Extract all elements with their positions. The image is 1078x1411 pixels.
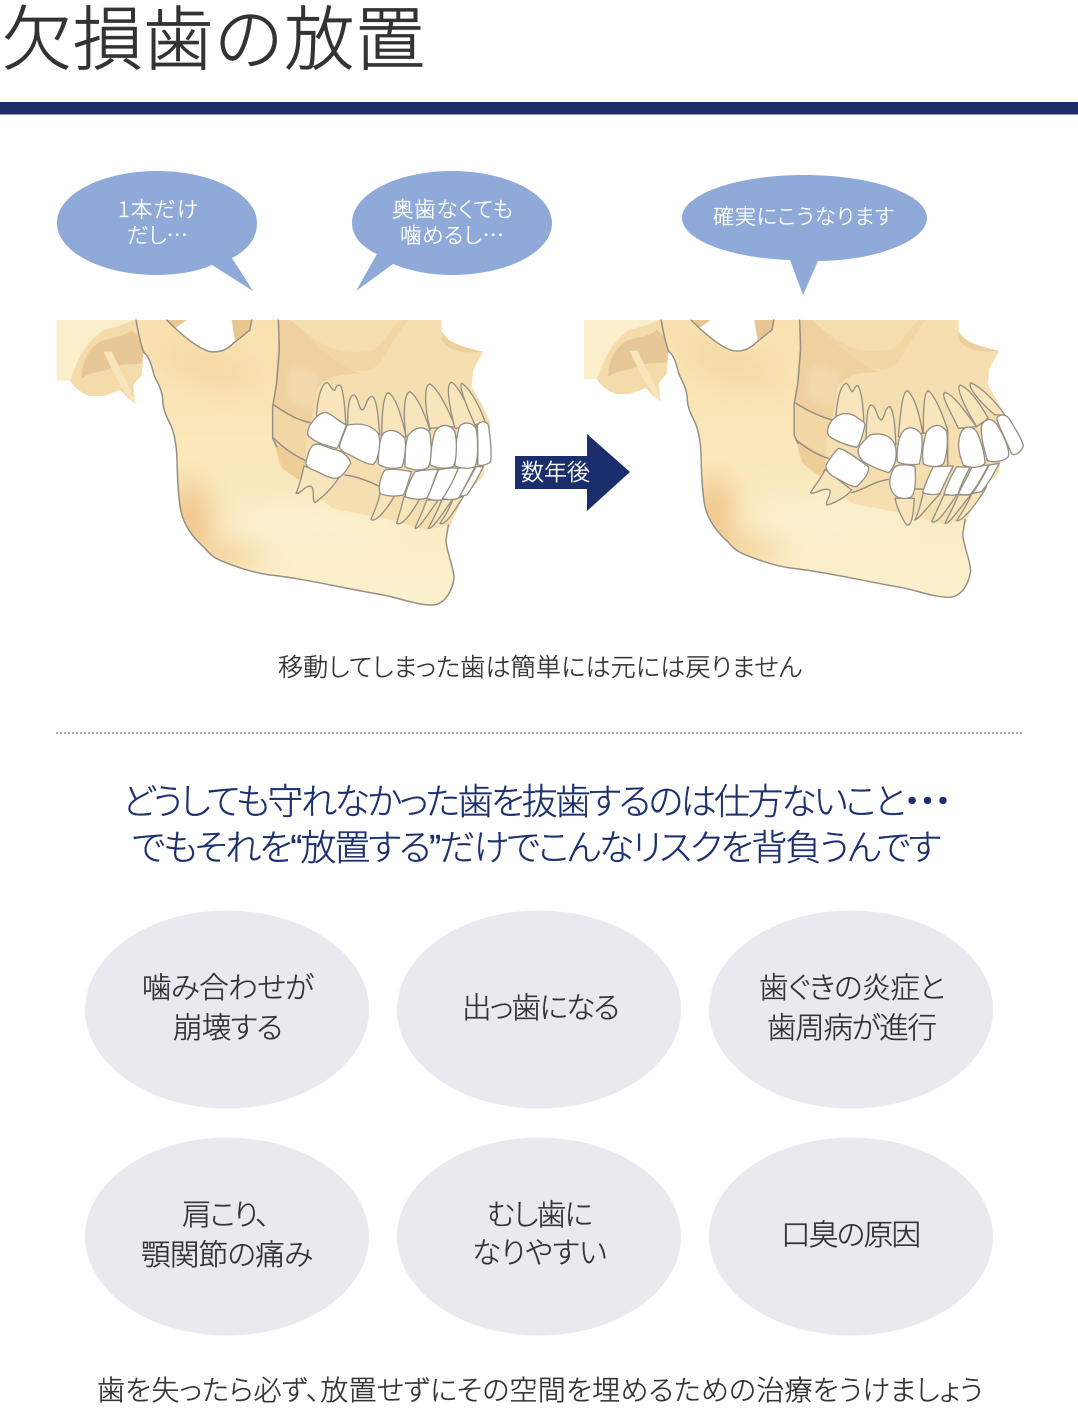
lower tooth roots	[296, 466, 463, 528]
arrow: 数年後: 数年後	[521, 453, 590, 487]
risk: むし歯になりやすい	[397, 1138, 681, 1336]
arrow: 数年後	[515, 434, 630, 511]
speech bubble: 奥歯なくても	[352, 171, 552, 291]
closing message: 歯を失ったら必ず、放置せずにその空間を埋めるための治療をうけましょう	[97, 1369, 983, 1409]
risk: 噛み合わせが崩壊する: 噛み合わせが	[142, 965, 314, 1007]
lower tooth roots	[811, 469, 987, 525]
lower crowns	[306, 444, 483, 500]
gum lines	[796, 403, 948, 493]
upper crowns	[828, 414, 1023, 473]
risk: むし歯になりやすい: なりやすい	[472, 1230, 607, 1272]
speech bubble: 1本だけだし	[57, 171, 257, 291]
risk: 口臭の原因: 口臭の原因	[781, 1212, 921, 1254]
risk: 歯ぐきの炎症と歯周病が進行: 歯周病が進行	[767, 1005, 937, 1047]
risk: 歯ぐきの炎症と歯周病が進行	[709, 910, 993, 1108]
title bar	[0, 102, 1078, 114]
lead text: でもそれを“放置する”だけでこんなリスクを背負うんです	[132, 827, 941, 868]
risk: 出っ歯になる: 出っ歯になる	[462, 985, 620, 1027]
jaw illustration: after	[584, 320, 1023, 597]
speech bubble: 1本だけだし: 1本だけ	[118, 193, 198, 224]
speech bubble: 確実にこうなります: 確実にこうなります	[713, 201, 894, 231]
risk: 肩こり、顎関節の痛み: 顎関節の痛み	[141, 1232, 313, 1274]
risk: 肩こり、顎関節の痛み	[85, 1138, 369, 1336]
risk: 口臭の原因	[709, 1138, 993, 1336]
lower crowns	[826, 448, 999, 498]
risk: 歯ぐきの炎症と歯周病が進行: 歯ぐきの炎症と	[759, 965, 945, 1007]
jaw illustration: before	[57, 320, 491, 605]
risk: 噛み合わせが崩壊する	[85, 910, 369, 1108]
upper crowns	[308, 413, 491, 470]
speech bubble: 奥歯なくても: 噛めるし…	[400, 219, 504, 250]
risk: 噛み合わせが崩壊する: 崩壊する	[173, 1005, 283, 1047]
risk: 肩こり、顎関節の痛み: 肩こり、	[182, 1192, 270, 1234]
lead text	[122, 773, 952, 868]
caption: 移動してしまった歯は簡単には元には戻りません	[278, 648, 802, 684]
lead text: どうしても守れなかった歯を抜歯するのは仕方ないこと･･･	[122, 773, 952, 825]
gum lines	[274, 405, 380, 487]
speech bubble: 奥歯なくても: 奥歯なくても	[392, 193, 513, 224]
risk: 出っ歯になる	[397, 910, 681, 1108]
speech bubble: 確実にこうなります	[682, 175, 927, 295]
risk: むし歯になりやすい: むし歯に	[487, 1192, 593, 1234]
speech bubble: 1本だけだし: だし…	[127, 219, 188, 250]
upper tooth roots	[836, 383, 1005, 445]
upper tooth roots	[317, 382, 485, 437]
